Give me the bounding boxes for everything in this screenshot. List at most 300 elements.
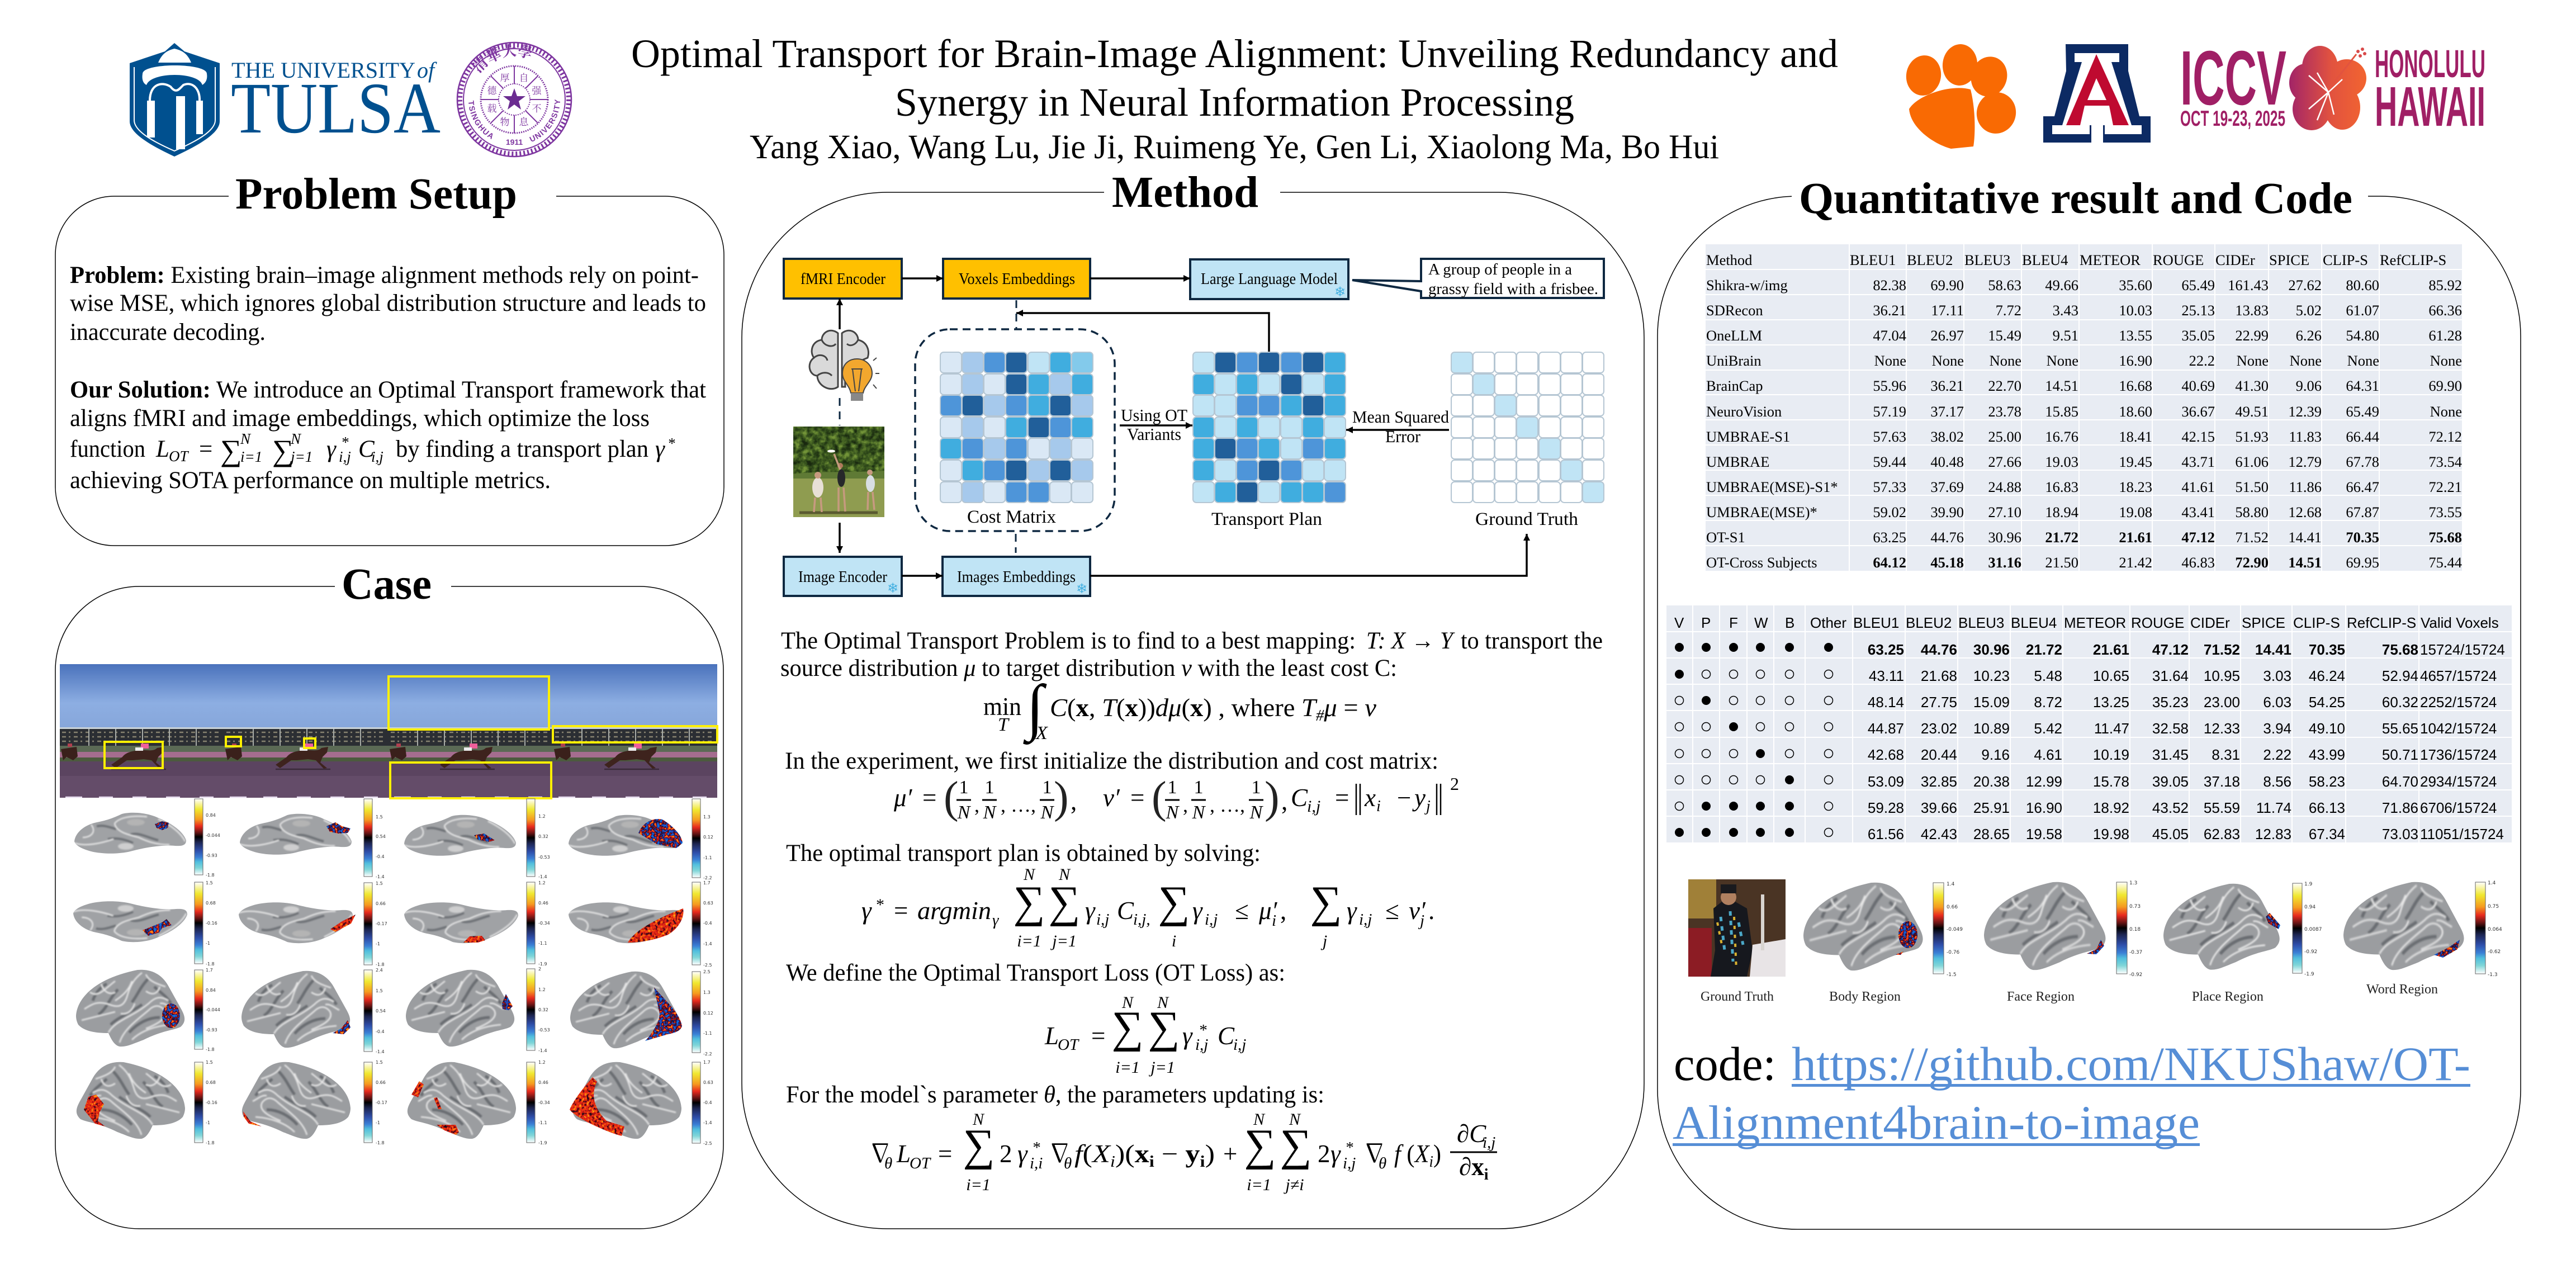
equation: parameter gradient: ∇	[1362, 1140, 1387, 1168]
colorbars: region figure: -0.76	[1947, 950, 1960, 955]
equation: parameter gradient: ∂C	[1457, 1120, 1486, 1148]
text block: our solution: γ	[655, 436, 665, 462]
table: method comparison: SDRecon	[1706, 302, 1763, 319]
table: method comparison: 47.04	[1873, 327, 1906, 344]
table: method comparison: None	[1990, 352, 2021, 369]
equation: parameter gradient: N	[972, 1110, 985, 1129]
text block: our solution: =	[199, 436, 212, 462]
heading: quantitative result and code: Quantitative result and Code	[1799, 174, 2352, 223]
equation: OT loss: i=1	[1115, 1058, 1140, 1077]
table: brain region ablation	[1666, 605, 2512, 842]
table: brain region ablation: 67.34	[2309, 826, 2345, 842]
logo: ICCV 2025 Honolulu Hawaii: HAWAII	[2375, 75, 2485, 138]
photo: ground truth	[1688, 879, 1786, 977]
captions: region figure: Word Region	[2366, 982, 2438, 997]
equation: parameter gradient: i	[1200, 1153, 1205, 1171]
colorbars: 0.66	[376, 901, 386, 906]
table: method comparison: 11.86	[2289, 479, 2322, 495]
table: method comparison: None	[2430, 403, 2462, 420]
text block: our solution: by finding a transport plan	[396, 436, 648, 462]
logo: Tsinghua University seal: 不	[532, 103, 541, 114]
equation: OT loss: C	[1218, 1022, 1235, 1050]
equation: transport plan: i=1	[1017, 932, 1041, 950]
table: brain region ablation: 63.25	[1868, 641, 1904, 658]
equation: transport plan: i,j	[1096, 911, 1109, 929]
colorbars: 1.7	[703, 880, 711, 886]
equation: parameter gradient: ∑	[1244, 1121, 1276, 1170]
table: method comparison: RefCLIP-S	[2380, 252, 2446, 268]
table: method comparison: 27.66	[1988, 453, 2021, 470]
colorbars: region figure: -1.5	[1947, 972, 1957, 978]
logo: University of Tulsa: THE UNIVERSITY	[231, 58, 415, 83]
equation: parameter gradient: f (X	[1394, 1140, 1430, 1168]
table: method comparison: 59.44	[1873, 453, 1906, 470]
colorbars: -1	[376, 1120, 380, 1125]
colorbars: region figure: -0.92	[2304, 949, 2317, 955]
table: brain region ablation: BLEU2	[1906, 614, 1952, 631]
colorbars: -0.16	[206, 1100, 217, 1105]
table: method comparison: 9.51	[2053, 327, 2078, 344]
panel: method	[742, 168, 1644, 1229]
method pipeline diagram	[784, 259, 1604, 596]
authors: Yang Xiao, Wang Lu, Jie Ji, Ruimeng Ye, Gen Li, Xiaolong Ma, Bo Hui	[750, 129, 1719, 166]
colorbars: -0.93	[206, 1027, 217, 1033]
table: method comparison	[1706, 244, 2462, 571]
colorbars: -1.4	[703, 1120, 712, 1125]
equation: transport plan: N	[1058, 865, 1071, 884]
equation: OT loss: i,j	[1195, 1036, 1208, 1054]
equation: parameter gradient: +	[1223, 1140, 1237, 1168]
table: brain region ablation: 43.52	[2152, 799, 2189, 816]
table: method comparison: 19.08	[2119, 504, 2152, 520]
table: method comparison: 24.88	[1988, 479, 2021, 495]
table: method comparison: 66.36	[2428, 302, 2462, 319]
equation: parameter gradient: N	[1289, 1110, 1301, 1129]
colorbars: -1.8	[206, 962, 215, 967]
callout: generated caption	[1352, 259, 1604, 298]
table: method comparison: 25.13	[2181, 302, 2215, 319]
colorbars: region figure: 0.064	[2488, 927, 2502, 932]
text block: our solution: L	[155, 436, 169, 462]
equation: parameter gradient: OT	[910, 1154, 931, 1172]
text block: our solution: i,j	[339, 448, 351, 465]
colorbars: 1.7	[206, 968, 213, 973]
colorbars: 1.2	[538, 880, 546, 886]
equation: parameter gradient: i	[1429, 1153, 1433, 1171]
table: method comparison: BLEU3	[1964, 252, 2010, 268]
table: brain region ablation: 42.68	[1868, 746, 1904, 763]
equation: transport plan: argmin	[917, 897, 991, 925]
colorbars: -0.4	[703, 921, 712, 926]
logo: University of Tulsa: TULSA	[231, 68, 441, 149]
equation: optimal transport problem: T	[998, 714, 1010, 735]
colorbars: 0.32	[538, 834, 548, 839]
equation: transport plan: =	[894, 897, 908, 925]
equation: transport plan: μ′	[1258, 897, 1278, 925]
equation: parameter gradient: *	[1032, 1139, 1040, 1157]
equation: optimal transport problem: C(x, T(x))dμ(x) , where T	[1050, 694, 1315, 722]
equation: initial distribution and cost matrix: ,	[1071, 787, 1077, 815]
header	[130, 31, 2485, 166]
table: brain region ablation: 25.91	[1973, 799, 2010, 816]
table: method comparison: 61.07	[2346, 302, 2379, 319]
colorbars: 0.68	[206, 1080, 216, 1085]
table: method comparison: 41.30	[2235, 377, 2269, 394]
table: brain region ablation: 21.61	[2093, 641, 2129, 658]
colorbars: 0.63	[703, 901, 713, 906]
colorbars: -0.4	[376, 1029, 385, 1034]
equation: OT loss: i,j	[1233, 1036, 1246, 1054]
table: method comparison: 63.25	[1873, 529, 1906, 546]
table: brain region ablation: 43.99	[2309, 746, 2345, 763]
table: method comparison: None	[2290, 352, 2322, 369]
equation: OT loss: =	[1091, 1022, 1105, 1050]
colorbars: -1.1	[538, 941, 547, 946]
text: optimal transport definition: to transport the	[1461, 628, 1603, 654]
table: method comparison: 12.79	[2288, 453, 2322, 470]
table: method comparison: 72.90	[2235, 554, 2269, 571]
table: method comparison: 38.02	[1930, 428, 1964, 445]
colorbars: 1.5	[206, 880, 213, 886]
colorbars: 1.5	[376, 988, 383, 993]
table: method comparison: 16.83	[2045, 479, 2078, 495]
table: brain region ablation: 12.99	[2026, 773, 2062, 790]
table: method comparison: 75.44	[2428, 554, 2462, 571]
equation: transport plan: *	[876, 896, 884, 914]
colorbars: 2.5	[703, 969, 711, 974]
equation: OT loss: N	[1121, 993, 1134, 1012]
colorbars: -1.8	[376, 962, 385, 967]
text block: our solution: N	[240, 430, 252, 447]
equation: OT loss: γ	[1182, 1022, 1193, 1050]
table: brain region ablation: 59.28	[1868, 799, 1904, 816]
table: brain region ablation: 21.68	[1921, 667, 1957, 684]
table: brain region ablation: 23.02	[1921, 720, 1957, 737]
table: method comparison: 59.02	[1873, 504, 1906, 520]
table: method comparison: 16.68	[2119, 377, 2152, 394]
table: method comparison: 18.94	[2045, 504, 2078, 520]
colorbars: -2.5	[703, 1141, 712, 1146]
table: method comparison: 27.62	[2288, 277, 2322, 293]
table: brain region ablation: 18.92	[2093, 799, 2129, 816]
equation: transport plan	[861, 865, 1434, 950]
table: method comparison: 22.99	[2235, 327, 2269, 344]
table: method comparison: 19.03	[2045, 453, 2078, 470]
text: optimal transport definition: source distribution μ to target distribution v with the least cost C:	[780, 655, 1397, 681]
equation: initial distribution and cost matrix: N	[1192, 802, 1206, 823]
equation: transport plan: .	[1428, 897, 1434, 925]
captions: region figure: Body Region	[1829, 989, 1901, 1004]
text block: problem: wise MSE, which ignores global distribution structure and leads to	[70, 290, 706, 316]
table: brain region ablation: 64.70	[2382, 773, 2418, 790]
colorbars: -0.53	[538, 1027, 550, 1033]
table: brain region ablation: 44.87	[1868, 720, 1904, 737]
equation: parameter gradient: j≠i	[1283, 1176, 1304, 1194]
text: optimal transport plan: The optimal transport plan is obtained by solving:	[786, 840, 1261, 866]
colorbars: region figure: 0.94	[2304, 905, 2315, 910]
heading: problem setup: Problem Setup	[235, 170, 517, 219]
table: brain region ablation: 31.64	[2152, 667, 2189, 684]
colorbars: region figure: 1.4	[2488, 880, 2496, 886]
table: brain region ablation: 3.03	[2263, 667, 2291, 684]
colorbars: -2.5	[703, 963, 712, 968]
equation: transport plan: i	[1272, 912, 1276, 930]
colorbars: region figure: -1.3	[2488, 972, 2498, 978]
table: brain region ablation: CLIP-S	[2293, 614, 2340, 631]
table: method comparison: 58.80	[2235, 504, 2269, 520]
diagram labels: Transport Plan	[1211, 509, 1322, 529]
equation: parameter gradient: )	[1433, 1140, 1441, 1168]
equation: initial distribution and cost matrix: , …,	[1001, 794, 1036, 816]
box: image encoder: Image Encoder	[798, 568, 887, 586]
text block: our solution: γ	[326, 436, 337, 462]
table: method comparison: 85.92	[2428, 277, 2462, 293]
colorbars: region figure: 0.66	[1947, 905, 1958, 910]
table: method comparison: 14.51	[2045, 377, 2078, 394]
table: brain region ablation: BLEU1	[1853, 614, 1899, 631]
diagram labels: Variants	[1127, 424, 1181, 444]
table: method comparison: 44.76	[1930, 529, 1964, 546]
logo: Tsinghua University seal: UNIVERSITY	[529, 100, 560, 142]
logo: orange paw	[1903, 42, 2020, 149]
colorbars: region figure: 1.9	[2304, 882, 2313, 887]
equation: initial distribution and cost matrix: 1	[959, 777, 968, 798]
equation: initial distribution and cost matrix: i,j	[1307, 797, 1320, 816]
colorbars: region figure: 1.4	[1947, 882, 1955, 887]
table: brain region ablation: Other	[1810, 614, 1846, 631]
box: image encoder: ❄	[887, 580, 898, 596]
table: method comparison: 51.50	[2235, 479, 2269, 495]
equation: parameter gradient: i,j	[1343, 1154, 1356, 1172]
colorbars: region figure: 0.18	[2129, 927, 2141, 932]
table: brain region ablation: 10.19	[2093, 746, 2129, 763]
table: method comparison: OT-Cross Subjects	[1706, 554, 1817, 571]
equation: parameter gradient: L	[896, 1140, 911, 1168]
box: voxels embeddings: Voxels Embeddings	[959, 270, 1075, 288]
text block: our solution: function	[70, 436, 145, 462]
logo: ICCV 2025 Honolulu Hawaii	[2180, 35, 2485, 138]
box: image encoder	[784, 557, 902, 596]
equation: initial distribution and cost matrix: ,	[1281, 787, 1287, 815]
equation: initial distribution and cost matrix: 2	[1450, 774, 1459, 794]
table: brain region ablation: 1736/15724	[2420, 746, 2497, 763]
table: brain region ablation: 49.10	[2309, 720, 2345, 737]
table: method comparison: 36.21	[1873, 302, 1906, 319]
equation: initial distribution and cost matrix: , …,	[1210, 794, 1245, 816]
table: brain region ablation: 5.42	[2034, 720, 2062, 737]
colorbars: 1.3	[703, 990, 711, 995]
equation: transport plan: i,j	[1359, 911, 1372, 929]
table: brain region ablation: W	[1754, 614, 1768, 631]
table: method comparison: ROUGE	[2153, 252, 2204, 268]
table: method comparison: 80.60	[2346, 277, 2379, 293]
colorbars: 1.7	[703, 1060, 711, 1065]
table: method comparison: Method	[1706, 252, 1752, 268]
table: method comparison: 37.69	[1930, 479, 1964, 495]
colorbars: 1.2	[538, 814, 546, 819]
title: Optimal Transport for Brain-Image Alignment: Unveiling Redundancy and	[631, 31, 1838, 76]
table: method comparison: 43.71	[2181, 453, 2215, 470]
text: parameter update: For the model`s parameter θ, the parameters updating is:	[786, 1082, 1324, 1108]
equation: OT loss: N	[1157, 993, 1169, 1012]
table: brain region ablation: METEOR	[2064, 614, 2126, 631]
table: method comparison: None	[2430, 352, 2462, 369]
table: brain region ablation: RefCLIP-S	[2347, 614, 2416, 631]
table: method comparison: OneLLM	[1706, 327, 1762, 344]
brains: body, face, place, word regions	[1803, 882, 2464, 970]
colorbars: 1.2	[538, 1060, 546, 1065]
table: brain region ablation: 47.12	[2152, 641, 2189, 658]
equation: initial distribution and cost matrix: ν′	[1103, 784, 1120, 812]
colorbars: 1.2	[538, 987, 546, 992]
equation: transport plan: ∑	[1310, 878, 1342, 927]
equation: parameter gradient: θ	[1064, 1154, 1072, 1172]
equation: transport plan: ∑	[1048, 878, 1081, 927]
equation: transport plan: γ	[1192, 897, 1203, 925]
diagram labels: Ground Truth	[1475, 509, 1578, 529]
colorbars: 1.5	[206, 1060, 213, 1065]
equation: initial distribution and cost matrix: N	[1040, 802, 1055, 823]
equation: OT loss: OT	[1058, 1036, 1079, 1054]
table: brain region ablation: 15.09	[1973, 694, 2010, 711]
captions: region figure	[1701, 982, 2438, 1004]
equation: initial distribution and cost matrix: (	[944, 773, 959, 822]
table: brain region ablation: V	[1674, 614, 1684, 631]
colorbars: 1.5	[376, 881, 383, 886]
colorbars: 2.4	[376, 968, 383, 973]
equation: optimal transport problem: X	[1035, 723, 1048, 744]
table: brain region ablation: 23.00	[2204, 694, 2240, 711]
table: method comparison: 14.41	[2288, 529, 2322, 546]
equation: parameter gradient: ∑	[1280, 1121, 1312, 1170]
table: method comparison: 15.85	[2045, 403, 2078, 420]
table: brain region ablation: 39.66	[1921, 799, 1957, 816]
table: method comparison: 23.78	[1988, 403, 2021, 420]
table: method comparison: 73.55	[2428, 504, 2462, 520]
colorbars: -0.17	[376, 921, 387, 926]
table: method comparison: None	[1874, 352, 1906, 369]
table: method comparison: 21.50	[2045, 554, 2078, 571]
equation: initial distribution and cost matrix: )	[1054, 773, 1069, 822]
table: brain region ablation: 20.38	[1973, 773, 2010, 790]
colorbars: 1.5	[376, 815, 383, 820]
diagram labels: Mean Squared	[1352, 407, 1449, 427]
colorbars: 0.66	[376, 1080, 386, 1085]
table: brain region ablation: 21.72	[2026, 641, 2062, 658]
equation: transport plan: N	[1023, 865, 1036, 884]
table: method comparison: 82.38	[1873, 277, 1906, 293]
table: brain region ablation: 46.24	[2309, 667, 2345, 684]
table: method comparison: 42.15	[2181, 428, 2215, 445]
equation: parameter gradient: θ	[884, 1154, 892, 1172]
table: method comparison: BLEU1	[1850, 252, 1896, 268]
equation: parameter gradient	[868, 1110, 1497, 1194]
colorbars: -1.4	[538, 1048, 547, 1053]
table: method comparison: 36.67	[2181, 403, 2215, 420]
table: brain region ablation: 11051/15724	[2420, 826, 2504, 842]
equation: transport plan: γ	[992, 911, 1000, 929]
colorbars: region figure: 0.0087	[2304, 927, 2322, 932]
table: brain region ablation: 54.25	[2309, 694, 2345, 711]
text block: our solution: ∑	[220, 434, 242, 467]
equation: optimal transport problem: ∫	[1023, 673, 1047, 745]
table: brain region ablation: 58.23	[2309, 773, 2345, 790]
equation: parameter gradient: 2	[1000, 1140, 1012, 1168]
table: method comparison: 25.00	[1988, 428, 2021, 445]
equation: parameter gradient: ∇	[868, 1140, 893, 1168]
table: method comparison: 57.33	[1873, 479, 1906, 495]
equation: transport plan: j	[1418, 912, 1424, 930]
text: OT loss definition: We define the Optimal Transport Loss (OT Loss) as:	[786, 960, 1285, 986]
brain surface activation grid	[73, 799, 713, 1146]
equation: transport plan: C	[1117, 897, 1134, 925]
table: brain region ablation: 6706/15724	[2420, 799, 2497, 816]
table: method comparison: None	[1932, 352, 1964, 369]
table: brain region ablation: B	[1785, 614, 1794, 631]
table: method comparison: UMBRAE(MSE)-S1*	[1706, 479, 1838, 495]
callout: generated caption: A group of people in a	[1428, 261, 1572, 278]
table: method comparison: 65.49	[2346, 403, 2379, 420]
table: method comparison: 37.17	[1930, 403, 1964, 420]
table: method comparison: CIDEr	[2215, 252, 2255, 268]
logo: Tsinghua University seal: 息	[519, 117, 529, 127]
table: brain region ablation: 52.94	[2382, 667, 2418, 684]
equation: parameter gradient: ∑	[963, 1121, 995, 1170]
matrix: cost	[940, 352, 1093, 503]
box: images embeddings: ❄	[1076, 581, 1087, 596]
colorbars: -1	[206, 941, 210, 946]
table: method comparison: 40.48	[1930, 453, 1964, 470]
logo: Tsinghua University seal: 1911	[506, 138, 523, 146]
brain row 2	[73, 901, 684, 943]
colorbars: 0.32	[538, 1007, 548, 1012]
table: method comparison: BrainCap	[1706, 377, 1763, 394]
colorbars: 0.12	[703, 1011, 713, 1016]
table: brain region ablation: 31.45	[2152, 746, 2189, 763]
table: method comparison: 16.90	[2119, 352, 2152, 369]
equation: initial distribution and cost matrix: μ′	[893, 784, 913, 812]
colorbars: 0.46	[538, 1080, 548, 1085]
table: method comparison: 54.80	[2346, 327, 2379, 344]
equation: optimal transport problem	[983, 673, 1376, 745]
colorbars: -1.1	[538, 1120, 547, 1125]
table: method comparison: 17.11	[1931, 302, 1964, 319]
text block: our solution: *	[667, 435, 675, 452]
table: brain region ablation: 11.47	[2094, 720, 2129, 737]
table: brain region ablation: 32.85	[1921, 773, 1957, 790]
equation: parameter gradient: θ	[1379, 1154, 1386, 1172]
colorbars: -0.93	[206, 853, 217, 858]
equation: initial distribution and cost matrix: j	[1424, 798, 1431, 815]
colorbars: region figure: 1.3	[2129, 880, 2137, 886]
text block: our solution: Our Solution: We introduce an Optimal Transport framework that	[70, 377, 706, 403]
panel: case	[55, 560, 723, 1229]
equation: parameter gradient: *	[1345, 1139, 1353, 1157]
table: method comparison: 35.05	[2181, 327, 2215, 344]
table: method comparison: UMBRAE	[1706, 453, 1769, 470]
equation: initial distribution and cost matrix: ,	[1183, 794, 1188, 816]
colorbars: -1.8	[206, 1140, 215, 1145]
equation: initial distribution and cost matrix: −	[1397, 784, 1411, 812]
table: brain region ablation: 10.89	[1973, 720, 2010, 737]
colorbars: -0.17	[376, 1100, 387, 1105]
equation: transport plan: ∑	[1158, 878, 1190, 927]
table: method comparison: None	[2237, 352, 2269, 369]
equation: transport plan: i,j,	[1133, 911, 1150, 929]
equation: OT loss: ∑	[1111, 1003, 1144, 1052]
text: experiment initialization: In the experiment, we first initialize the distribution and cost matrix:	[785, 748, 1438, 774]
table: brain region ablation: BLEU4	[2011, 614, 2057, 631]
